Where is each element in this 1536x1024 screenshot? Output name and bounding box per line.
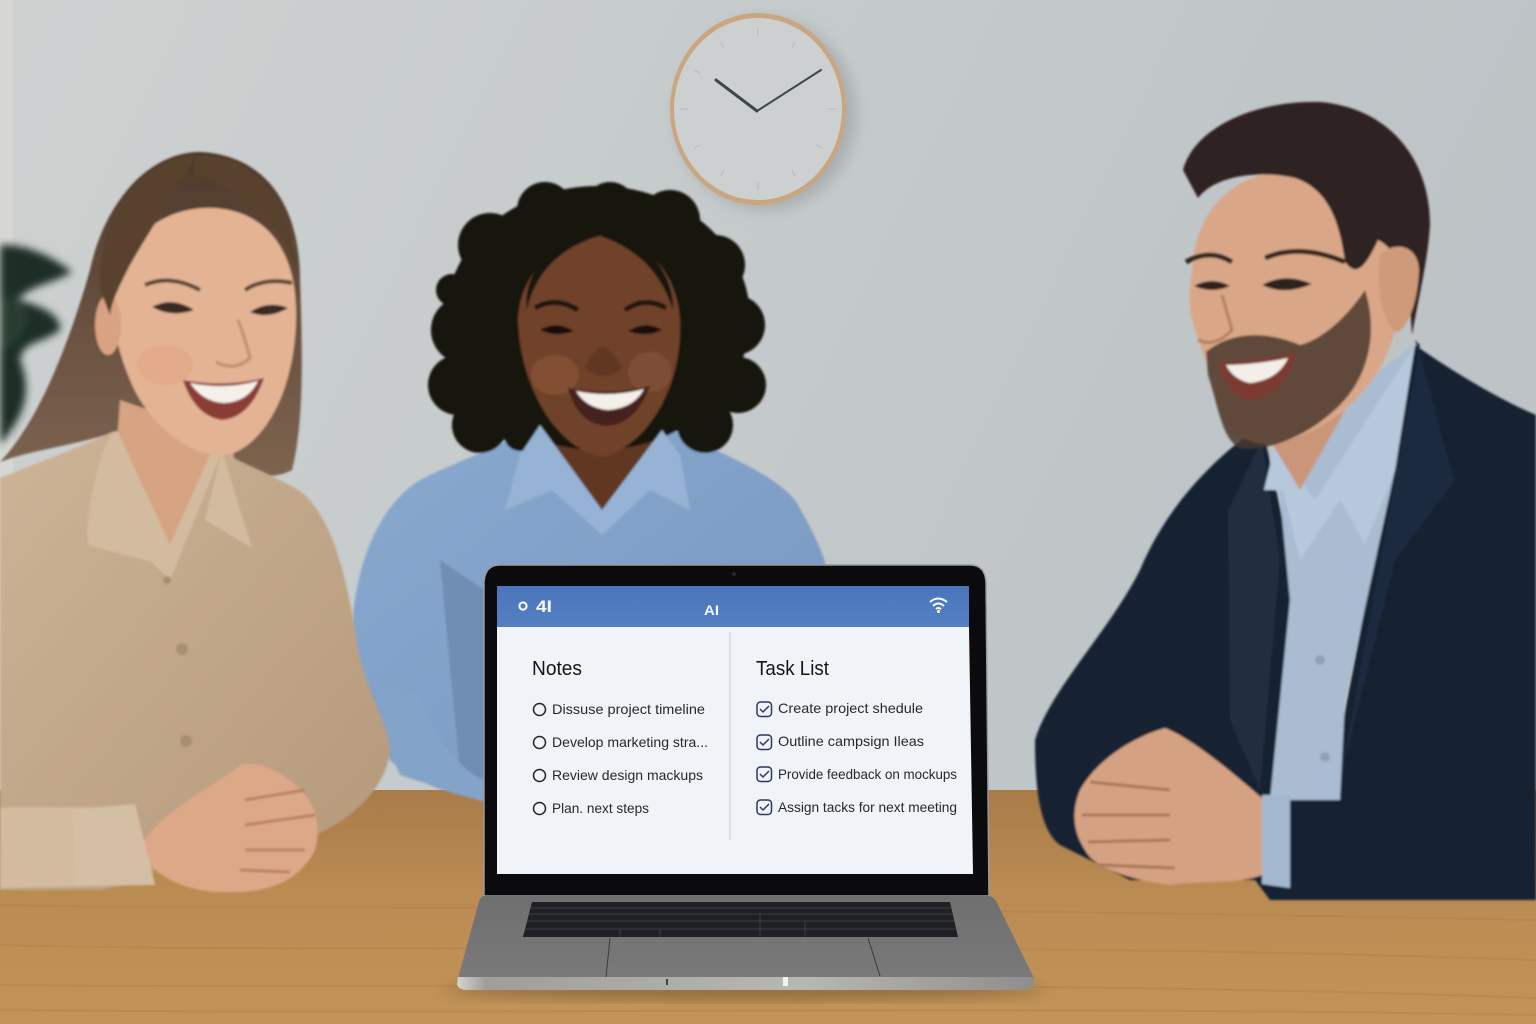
- laptop base: [457, 896, 1034, 990]
- clasped hands: [1075, 728, 1262, 885]
- facial features: [145, 281, 292, 290]
- task list column: [756, 658, 957, 815]
- wall clock: [670, 13, 856, 210]
- facial features: [1186, 251, 1345, 262]
- laptop screen: [497, 586, 973, 874]
- hair top over forehead: [100, 155, 298, 315]
- notes column: Develop marketing stra...: [552, 734, 708, 750]
- hair: [1183, 102, 1430, 335]
- face: [518, 236, 680, 457]
- wall background: [0, 0, 1536, 800]
- laptop front edge: [457, 977, 1034, 990]
- collar: [505, 425, 690, 535]
- neck: [545, 410, 665, 530]
- notes column: Dissuse project timeline: [552, 701, 705, 717]
- task list column: Outline campsign Ileas: [778, 733, 924, 749]
- screen header: [519, 597, 947, 618]
- clasped hands: [138, 764, 318, 892]
- navy blazer: [1035, 345, 1536, 900]
- task list column: Task List: [756, 658, 829, 680]
- notes column: Review design mackups: [552, 767, 703, 783]
- screen header: AI: [704, 602, 719, 618]
- person: woman on the left: [0, 152, 390, 892]
- hair: [428, 182, 766, 453]
- light blue shirt: [1270, 345, 1415, 800]
- neck: [115, 400, 235, 560]
- plant: [0, 245, 72, 445]
- ear: [1379, 247, 1419, 332]
- person: woman in centre: [352, 182, 826, 802]
- face: [113, 208, 296, 455]
- task list column: Provide feedback on mockups: [778, 766, 957, 782]
- beard: [1206, 290, 1371, 449]
- notes column: Plan. next steps: [552, 800, 649, 816]
- notes column: Notes: [532, 658, 582, 680]
- beige shirt: [0, 432, 390, 890]
- task list column: Assign tacks for next meeting: [778, 799, 957, 815]
- facial features: [535, 302, 666, 310]
- notes column: [532, 658, 708, 816]
- sleeve left: [72, 804, 155, 885]
- back hair: [0, 152, 302, 476]
- clock hands: [716, 70, 821, 111]
- screen header: 4I: [536, 597, 552, 616]
- face: [1190, 170, 1400, 444]
- task list column: Create project shedule: [778, 700, 923, 716]
- table: [0, 790, 1536, 1024]
- keyboard: [523, 902, 958, 937]
- person: man on the right: [1035, 102, 1536, 900]
- laptop: [445, 565, 1045, 1000]
- blue shirt: [352, 428, 826, 800]
- laptop lid: [484, 565, 989, 896]
